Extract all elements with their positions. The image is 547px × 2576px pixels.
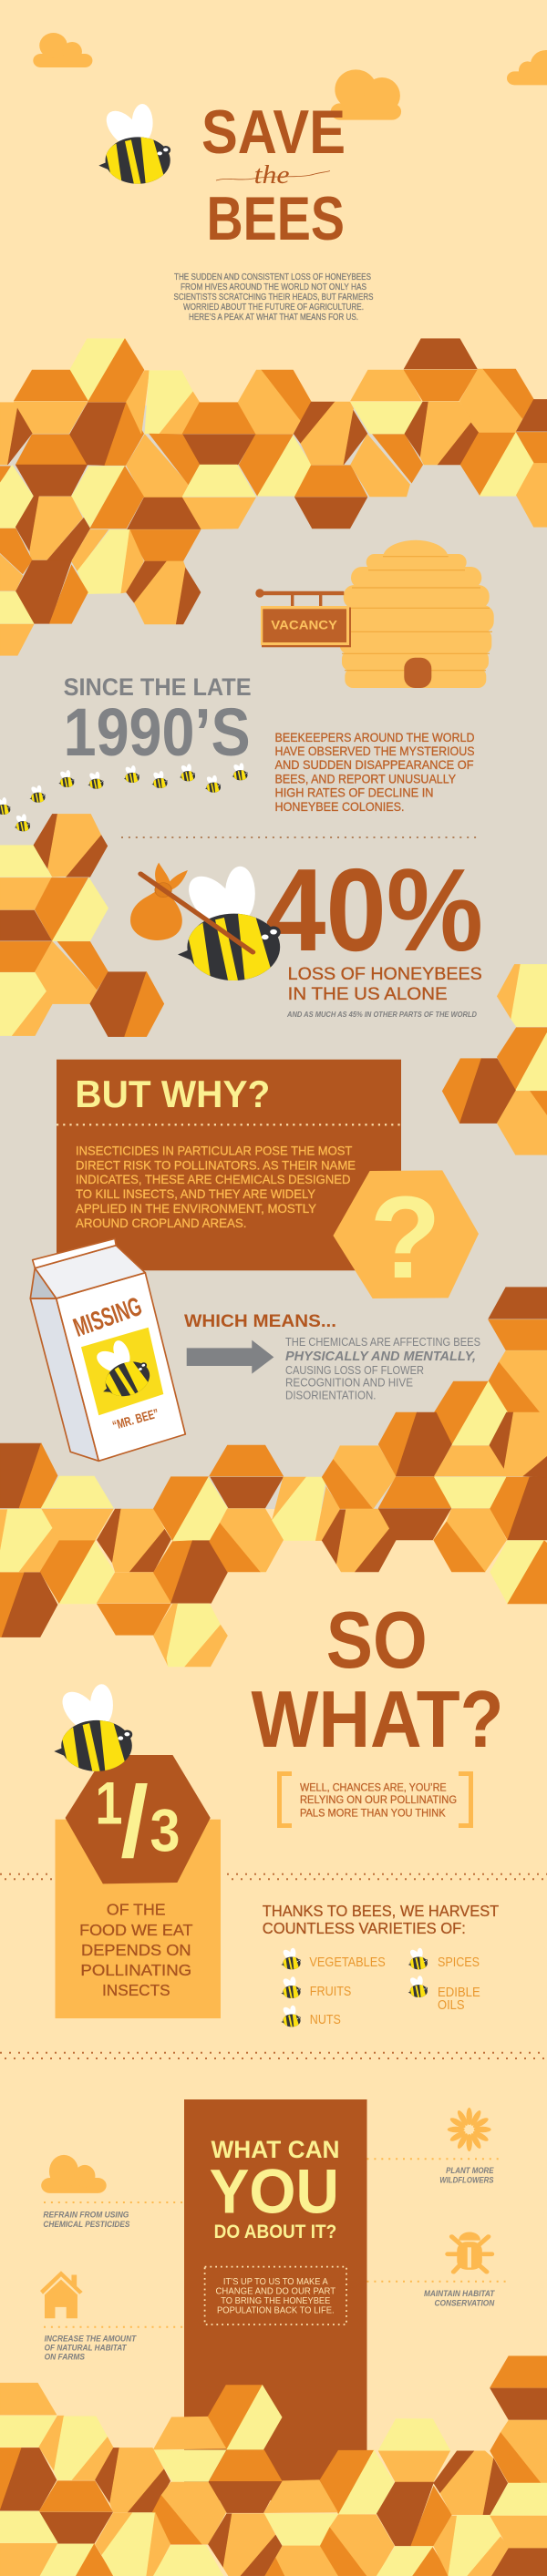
list: varieties [281,1948,480,2027]
heading: thanks to bees [263,1902,499,1937]
text: up to us: TO BRING THE HONEYBEE [221,2296,330,2306]
heading: what can you do about it: DO ABOUT IT? [214,2222,336,2242]
text: insecticides: INSECTICIDES IN PARTICULAR POSE THE MOST [76,1144,353,1157]
text: up to us: POPULATION BACK TO LIFE. [217,2306,335,2316]
stat: 1/3: 3 [150,1797,181,1864]
stat: 1/3: / [120,1766,149,1878]
intro text: WORRIED ABOUT THE FUTURE OF AGRICULTURE. [183,303,364,313]
icon: beehive with vacancy sign [255,540,494,688]
list: varieties: VEGETABLES [309,1955,386,1970]
icon: missing milk carton: “MR. BEE” [110,1405,160,1432]
text: insecticides: INDICATES, THESE ARE CHEMICALS DESIGNED [76,1173,351,1186]
callout: relying on pollinating pals: RELYING ON OUR POLLINATING [300,1795,457,1806]
note: 45 percent: AND AS MUCH AS 45% IN OTHER PARTS OF THE WORLD [286,1010,477,1019]
honeycomb band: middle [0,1288,547,1667]
action: habitat conservation: CONSERVATION [434,2298,495,2307]
action: refrain from pesticides: REFRAIN FROM USING [43,2210,129,2219]
icon: question hexagon: ? [370,1173,441,1303]
heading: thanks to bees: THANKS TO BEES, WE HARVEST [263,1902,499,1920]
stat: 40%: LOSS OF HONEYBEES [288,965,482,984]
stat: 1/3 [95,1766,181,1878]
text: beekeepers: BEEKEEPERS AROUND THE WORLD [275,731,475,744]
text: insecticides: TO KILL INSECTS, AND THEY ARE WIDELY [76,1187,315,1201]
intro text [173,272,374,323]
text: insecticides [76,1144,356,1230]
clouds at top [33,33,547,120]
text: of the food we eat: FOOD WE EAT [79,1921,193,1939]
title [201,97,346,253]
text: of the food we eat: POLLINATING [80,1961,191,1979]
action: natural habitat [40,2271,184,2362]
text: up to us [215,2277,336,2316]
action: plant wildflowers [366,2108,499,2184]
text: chemicals [285,1336,480,1402]
honeycomb cluster: right of but why [442,1028,547,1155]
heading: so what: SO [326,1595,428,1685]
text: chemicals: RECOGNITION AND HIVE [285,1376,413,1389]
tiny bee trail [0,763,248,832]
action: plant wildflowers: WILDFLOWERS [439,2175,494,2184]
text: chemicals: THE CHEMICALS ARE AFFECTING BEES [285,1336,480,1349]
stat: 40%: 40% [265,845,483,976]
icon: question hexagon [333,1170,479,1303]
list: varieties: SPICES [438,1955,480,1970]
action: habitat conservation: MAINTAIN HABITAT [424,2289,495,2298]
text: beekeepers: HIGH RATES OF DECLINE IN [275,785,434,800]
callout: relying on pollinating pals: PALS MORE THAN YOU THINK [300,1808,446,1819]
title: the [254,161,290,190]
heading: so what: WHAT? [252,1674,503,1764]
arrow [187,1340,274,1374]
heading: what can you do about it: WHAT CAN [212,2136,339,2163]
action: natural habitat: ON FARMS [45,2353,86,2362]
intro text: SCIENTISTS SCRATCHING THEIR HEADS, BUT FARMERS [173,292,374,303]
text: beekeepers: AND SUDDEN DISAPPEARANCE OF [275,758,474,772]
action: refrain from pesticides: CHEMICAL PESTICIDES [43,2220,130,2229]
honeycomb cluster: left and right middle [0,814,547,1037]
heading: which means: WHICH MEANS... [184,1311,336,1331]
heading: since the late 1990's: 1990’S [64,694,251,770]
stat: 1/3: 1 [95,1770,122,1837]
icon: missing milk carton: MISSING [70,1292,146,1343]
list: varieties: FRUITS [310,1984,351,1999]
honeycomb band: top [0,339,547,655]
title: SAVE [201,97,346,167]
list: varieties: OILS [438,1997,465,2013]
intro text: FROM HIVES AROUND THE WORLD NOT ONLY HAS [181,282,366,292]
text: chemicals: PHYSICALLY AND MENTALLY, [285,1350,476,1364]
heading: so what [252,1595,503,1764]
title: BEES [206,184,345,253]
callout: relying on pollinating pals [279,1773,470,1826]
sign text: VACANCY [271,619,337,632]
intro text: THE SUDDEN AND CONSISTENT LOSS OF HONEYBEES [174,272,371,282]
panel: what can you do [184,2099,366,2500]
icon: so what bee [54,1684,132,1773]
action: habitat conservation [366,2232,508,2307]
icon: missing milk carton [30,1238,185,1461]
text: of the food we eat: OF THE [107,1901,166,1919]
list: varieties: EDIBLE [438,1985,480,2000]
text: beekeepers: BEES, AND REPORT UNUSUALLY [275,773,456,785]
callout: relying on pollinating pals: WELL, CHANCES ARE, YOU’RE [300,1783,447,1794]
text: beekeepers: HONEYBEE COLONIES. [275,800,405,814]
list: varieties: NUTS [310,2012,341,2027]
text: of the food we eat: DEPENDS ON [81,1941,191,1959]
stat: 40%: IN THE US ALONE [288,985,448,1004]
intro text: HERE’S A PEAK AT WHAT THAT MEANS FOR US. [189,313,358,323]
panel: but why [57,1060,401,1270]
heading: but why: BUT WHY? [75,1072,270,1115]
action: natural habitat: OF NATURAL HABITAT [45,2344,128,2353]
text: of the food we eat: INSECTS [102,1981,170,1999]
text: up to us: CHANGE AND DO OUR PART [215,2287,336,2296]
heading: what can you do about it [210,2136,339,2242]
icon: bee with bundle on stick [130,863,281,983]
action: refrain from pesticides [41,2155,184,2229]
icon: title bee [98,104,170,186]
text: beekeepers [275,731,475,814]
text: chemicals: DISORIENTATION. [285,1390,376,1402]
action: natural habitat: INCREASE THE AMOUNT [45,2334,137,2343]
text: beekeepers: HAVE OBSERVED THE MYSTERIOUS [275,744,474,758]
heading: thanks to bees: COUNTLESS VARIETIES OF: [263,1919,466,1937]
text: insecticides: DIRECT RISK TO POLLINATORS. AS THEIR NAME [76,1158,356,1172]
text: chemicals: CAUSING LOSS OF FLOWER [285,1364,424,1377]
text: of the food we eat [79,1901,193,1999]
dotted double dividers [0,1874,547,2058]
text: up to us: IT’S UP TO US TO MAKE A [223,2277,328,2287]
text: insecticides: APPLIED IN THE ENVIRONMENT, MOSTLY [76,1202,316,1216]
heading: what can you do about it: YOU [210,2156,339,2226]
action: plant wildflowers: PLANT MORE [446,2166,494,2175]
honeycomb band: bottom [0,2356,547,2576]
text: insecticides: AROUND CROPLAND AREAS. [76,1216,246,1230]
panel: one third [55,1755,221,2018]
heading: since the late 1990's: SINCE THE LATE [64,673,252,701]
